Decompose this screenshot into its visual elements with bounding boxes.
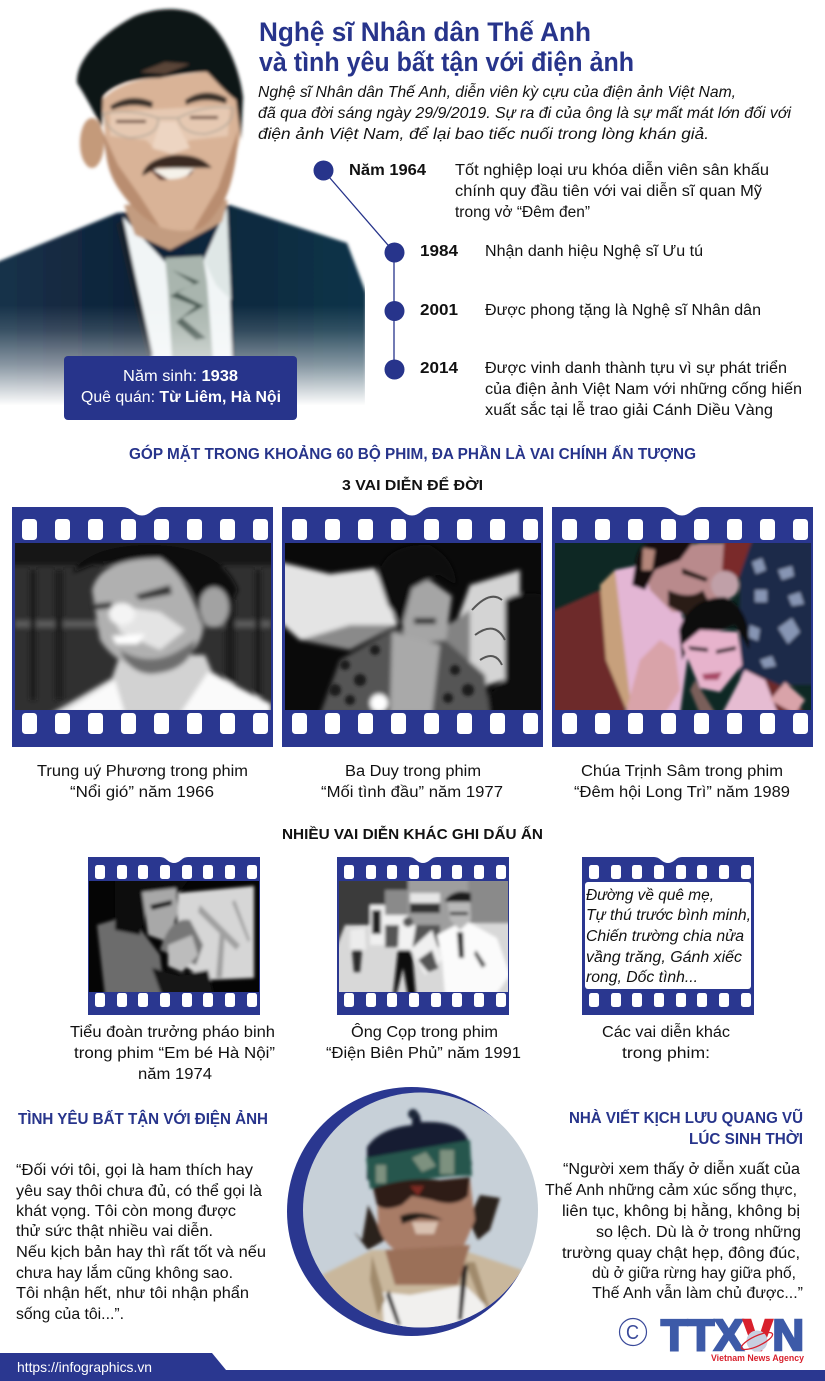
list of film titles [586, 887, 751, 986]
TTXVN logo: TTXVN [661, 1311, 804, 1360]
list of film titles: vầng trăng, Gánh xiếc [586, 949, 742, 966]
caption 2: Ba Duy trong phim [345, 763, 481, 780]
milestone 1984: 1984 [420, 243, 458, 260]
milestone 2014: của điện ảnh Việt Nam với những cống hiến [485, 381, 802, 398]
timeline [314, 160, 802, 419]
left quote: “Đối với tôi, gọi là ham thích hay [16, 1162, 253, 1179]
small film frame 2 [335, 857, 512, 1015]
subheading: other roles: NHIỀU VAI DIỄN KHÁC GHI DẤU ẤN [282, 826, 543, 843]
milestone 1984 [384, 242, 703, 262]
film frame 1 [0, 507, 290, 747]
right quote [545, 1161, 803, 1302]
milestone 1964: chính quy đầu tiên với vai diễn sĩ quan Mỹ [455, 183, 762, 200]
info box: birth year and hometown: Năm sinh: 1938 [123, 368, 238, 385]
list of film titles: rong, Dốc tình... [586, 969, 698, 986]
still: Nổi gió [15, 543, 271, 710]
list of film titles: Tự thú trước bình minh, [586, 907, 751, 924]
caption 2 [321, 763, 503, 801]
small film frame 1 [88, 857, 260, 1015]
right quote: so lệch. Dù là ở trong những [596, 1224, 801, 1241]
right quote: dù ở giữa rừng hay giữa phố, [592, 1265, 796, 1282]
subheading: 3 roles: 3 VAI DIỄN ĐỂ ĐỜI [342, 476, 483, 494]
milestone 2001: Được phong tặng là Nghệ sĩ Nhân dân [485, 302, 761, 319]
left quote: Tôi nhận hết, như tôi nhận phẩn [16, 1285, 249, 1302]
caption small 2 [326, 1024, 521, 1062]
milestone 1984: Nhận danh hiệu Nghệ sĩ Ưu tú [485, 243, 703, 260]
right heading: NHÀ VIẾT KỊCH LƯU QUANG VŨ [569, 1109, 803, 1127]
caption small 1: Tiểu đoàn trưởng pháo binh [70, 1024, 275, 1041]
intro text: đã qua đời sáng ngày 29/9/2019. Sự ra đi của ông là sự mất mát lớn đối với [258, 105, 791, 122]
left quote: sống của tôi...”. [16, 1306, 124, 1323]
milestone 2014 [384, 360, 802, 419]
left quote: khát vọng. Tôi còn mong được [16, 1203, 236, 1220]
still: Điện Biên Phủ [339, 881, 508, 992]
left quote: yêu say thôi chưa đủ, có thể gọi là [16, 1183, 262, 1200]
info box: birth year and hometown [64, 356, 297, 420]
caption 1 [37, 763, 248, 801]
caption 3: Chúa Trịnh Sâm trong phim [581, 763, 783, 780]
caption small 3 [602, 1024, 730, 1062]
right quote: liên tục, không bị hằng, không bị [562, 1203, 800, 1220]
left quote [16, 1162, 266, 1323]
right heading [569, 1109, 803, 1148]
caption small 3: trong phim: [622, 1045, 710, 1062]
intro text: Nghệ sĩ Nhân dân Thế Anh, diễn viên kỳ cựu của điện ảnh Việt Nam, [258, 82, 736, 101]
title: và tình yêu bất tận với điện ảnh [259, 47, 634, 77]
caption small 1: năm 1974 [138, 1066, 212, 1083]
caption small 2: Ông Cọp trong phim [351, 1024, 498, 1041]
left heading: TÌNH YÊU BẤT TẬN VỚI ĐIỆN ẢNH [18, 1110, 268, 1128]
milestone 2014: Được vinh danh thành tựu vì sự phát triển [485, 360, 787, 377]
still: Đêm hội Long Trì [550, 540, 815, 714]
caption small 1 [70, 1024, 275, 1083]
caption 3 [574, 763, 790, 801]
right quote: trường quay chật hẹp, đông đúc, [562, 1245, 800, 1262]
milestone 2001: 2001 [420, 302, 458, 319]
milestone 1964: Tốt nghiệp loại ưu khóa diễn viên sân khấu [455, 162, 769, 179]
list of film titles: Chiến trường chia nửa [586, 928, 744, 945]
portrait photo: Thế Anh [0, 9, 366, 420]
footer bar: https://infographics.vn [17, 1359, 152, 1375]
film frame 2 [280, 507, 545, 747]
section heading: GÓP MẶT TRONG KHOẢNG 60 BỘ PHIM, ĐA PHẦN LÀ VAI CHÍNH ẤN TƯỢNG [129, 445, 696, 463]
copyright symbol [620, 1318, 646, 1346]
caption 3: “Đêm hội Long Trì” năm 1989 [574, 784, 790, 801]
right quote: Thế Anh vẫn làm chủ được...” [592, 1285, 803, 1302]
milestone 2001 [384, 301, 761, 321]
right quote: “Người xem thấy ở diễn xuất của [563, 1161, 800, 1178]
film frame 3 [550, 507, 815, 747]
milestone 1964: Năm 1964 [349, 162, 426, 179]
intro text: điện ảnh Việt Nam, để lại bao tiếc nuối trong lòng khán giả. [258, 125, 709, 143]
small film frame 3: other films list [582, 857, 754, 1015]
still: Mối tình đầu [280, 543, 545, 714]
TTXVN logo: Vietnam News Agency [711, 1353, 804, 1363]
caption 1: Trung uý Phương trong phim [37, 763, 248, 780]
caption small 1: trong phim “Em bé Hà Nội” [74, 1045, 275, 1062]
milestone 1964 [314, 160, 769, 221]
left quote: chưa hay lắm cũng không sao. [16, 1265, 233, 1282]
left quote: thử sức thật nhiều vai diễn. [16, 1223, 213, 1240]
caption 1: “Nổi gió” năm 1966 [70, 784, 214, 801]
copyright symbol: C [626, 1322, 639, 1344]
left quote: Nếu kịch bản hay thì rất tốt và nếu [16, 1244, 266, 1261]
caption small 2: “Điện Biên Phủ” năm 1991 [326, 1045, 521, 1062]
caption small 3: Các vai diễn khác [602, 1024, 730, 1041]
right heading: LÚC SINH THỜI [689, 1130, 803, 1148]
right quote: Thế Anh những cảm xúc sống thực, [545, 1182, 797, 1199]
circular portrait: Lưu Quang Vũ [287, 1087, 538, 1345]
milestone 1964: trong vở “Đêm đen” [455, 204, 590, 221]
milestone 2014: xuất sắc tại lễ trao giải Cánh Diều Vàng [485, 402, 773, 419]
footer bar [0, 1353, 825, 1381]
intro text [258, 82, 791, 143]
title: Nghệ sĩ Nhân dân Thế Anh [259, 17, 591, 47]
still: Em bé Hà Nội [89, 878, 259, 996]
list of film titles: Đường về quê mẹ, [586, 887, 714, 904]
info box: birth year and hometown: Quê quán: Từ Liêm, Hà Nội [81, 389, 281, 406]
milestone 2014: 2014 [420, 360, 458, 377]
caption 2: “Mối tình đầu” năm 1977 [321, 784, 503, 801]
title [259, 17, 634, 77]
